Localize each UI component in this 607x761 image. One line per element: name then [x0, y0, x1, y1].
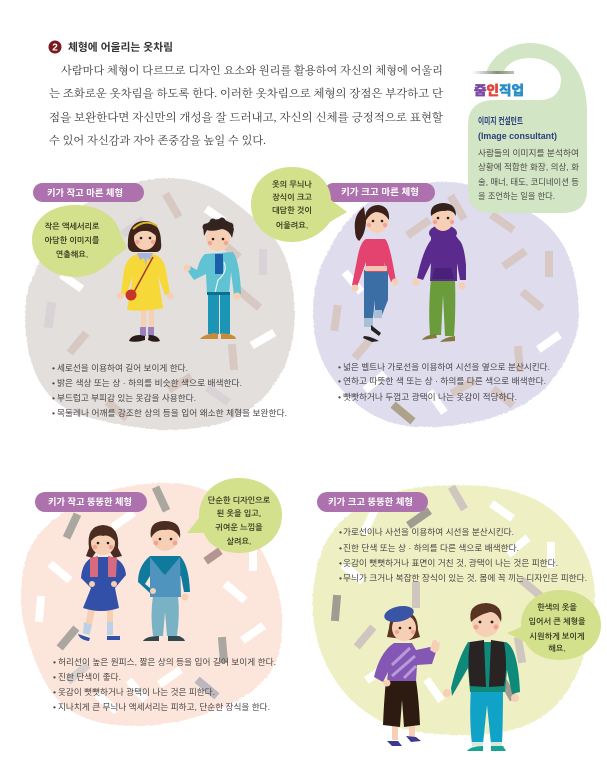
speech bubble: single colour: 입어서 큰 체형을 — [528, 617, 586, 626]
intro paragraph: 수 있어 자신감과 자아 존중감을 높일 수 있다. — [49, 133, 266, 147]
confetti strips — [330, 194, 562, 424]
bullet list: 진한 단색이 좋다. — [58, 672, 121, 682]
speech bubble: small accessories — [32, 205, 127, 277]
bullet list: • — [339, 527, 342, 537]
blob background — [21, 483, 282, 726]
bullet list: • — [339, 573, 342, 583]
character: boy in purple hoodie — [412, 203, 466, 342]
label: short and stout: 키가 작고 뚱뚱한 체형 — [48, 496, 132, 507]
bullet list: 빳빳하거나 두껍고 광택이 나는 옷감이 적당하다. — [343, 392, 517, 402]
bullet list: 옷감이 뻣뻣하거나 광택이 나는 것은 피한다. — [58, 687, 215, 697]
speech bubble: single colour: 한색의 옷을 — [537, 603, 577, 612]
character: girl in pink top — [352, 205, 398, 342]
bullet list: • — [52, 378, 55, 388]
bullet list: • — [338, 376, 341, 386]
number badge: 2 — [52, 42, 58, 54]
speech bubble: single colour: 시원하게 보이게 — [530, 632, 584, 641]
bullet list — [53, 657, 276, 712]
bullet list: 진한 단색 또는 상 · 하의를 다른 색으로 배색한다. — [343, 543, 519, 553]
speech bubble: single colour: 해요. — [548, 644, 566, 653]
panel: tall and thin — [313, 182, 579, 427]
bullet list: 넓은 벨트나 가로선을 이용하여 시선을 옆으로 분산시킨다. — [343, 362, 550, 372]
label: tall and thin — [324, 183, 435, 202]
intro paragraph: 는 조화로운 옷차림을 하도록 한다. 이러한 옷차림으로 체형의 장점은 부각하고 단 — [49, 86, 443, 100]
blob background — [313, 485, 595, 735]
bullet list — [339, 527, 587, 583]
speech bubble: small accessories: 연출해요. — [56, 250, 88, 259]
hanger shadow — [472, 71, 514, 74]
label: short and stout — [35, 492, 147, 512]
bullet list: • — [338, 362, 341, 372]
speech bubble: simple design: 귀여운 느낌을 — [214, 523, 263, 532]
bullet list: • — [339, 543, 342, 553]
bullet list: • — [339, 558, 342, 568]
bullet list: 세로선을 이용하여 길어 보이게 한다. — [57, 363, 188, 373]
bullet list: • — [52, 408, 55, 418]
door hanger: job info card — [468, 43, 587, 213]
bullet list: 연하고 따뜻한 색 또는 상 · 하의를 다른 색으로 배색한다. — [343, 376, 546, 386]
card body: 술, 매너, 태도, 코디네이션 등 — [478, 177, 579, 187]
bullet list: 목둘레나 어깨를 강조한 상의 등을 입어 왜소한 체형을 보완한다. — [57, 408, 287, 418]
label: tall and stout: 키가 크고 뚱뚱한 체형 — [328, 496, 413, 507]
bullet list: 지나치게 큰 무늬나 액세서리는 피하고, 단순한 장식을 한다. — [58, 702, 270, 712]
card heading — [478, 115, 557, 141]
panel: short and thin — [25, 178, 295, 430]
character: man in black vest — [443, 603, 520, 751]
label: short and thin — [33, 183, 144, 202]
speech bubble: bold patterns: 어울려요. — [276, 221, 308, 230]
label: short and thin: 키가 작고 마른 체형 — [47, 187, 123, 198]
hanger shape — [468, 43, 587, 213]
card body — [478, 148, 579, 201]
heading text: 체형에 어울리는 옷차림 — [68, 40, 173, 54]
speech bubble: single colour — [507, 590, 601, 660]
speech bubble: simple design: 단순한 디자인으로 — [208, 496, 271, 505]
character: boy in blue jacket — [184, 218, 241, 339]
card body: 상황에 적합한 화장, 의상, 화 — [478, 162, 579, 172]
intro paragraph: 점을 보완한다면 자신만의 개성을 잘 드러내고, 자신의 신체를 긍정적으로 표현할 — [49, 110, 443, 124]
panel: short and stout — [21, 478, 282, 726]
bullet list — [52, 363, 287, 418]
speech bubble: bold patterns — [251, 167, 347, 242]
blob background — [25, 178, 295, 430]
bullet list: • — [52, 363, 55, 373]
bullet list: • — [53, 672, 56, 682]
character: girl in yellow dress — [116, 221, 174, 342]
card body: 사람들의 이미지를 분석하여 — [478, 148, 579, 158]
section heading — [48, 40, 173, 54]
bullet list: • — [53, 657, 56, 667]
bullet list: 무늬가 크거나 복잡한 장식이 있는 것, 몸에 꼭 끼는 디자인은 피한다. — [343, 573, 587, 583]
card heading: (Image consultant) — [478, 131, 557, 141]
confetti strips — [44, 192, 276, 421]
intro paragraph: 사람마다 체형이 다르므로 디자인 요소와 원리를 활용하여 자신의 체형에 어울리 — [61, 63, 443, 77]
bullet list: 허리선이 높은 원피스, 짧은 상의 등을 입어 길어 보이게 한다. — [58, 657, 276, 667]
bullet list: • — [53, 687, 56, 697]
character: boy in blue vest — [138, 521, 190, 641]
bullet list: 밝은 색상 또는 상 · 하의를 비슷한 색으로 배색한다. — [57, 378, 242, 388]
bullet list: • — [338, 392, 341, 402]
confetti strips — [35, 486, 266, 714]
speech bubble: small accessories: 작은 액세서리로 — [45, 222, 100, 231]
speech bubble: small accessories: 아담한 이미지를 — [45, 236, 100, 245]
card body: 을 조언하는 일을 한다. — [478, 191, 555, 201]
panel: tall and stout — [313, 485, 601, 751]
speech bubble: simple design — [187, 478, 282, 553]
bullet list: 가로선이나 사선을 이용하여 시선을 분산시킨다. — [343, 527, 514, 537]
confetti strips — [331, 485, 555, 703]
bullet list — [338, 362, 550, 402]
label: tall and stout — [317, 492, 428, 512]
bullet list: 부드럽고 부피감 있는 옷감을 사용한다. — [57, 393, 196, 403]
bullet list: 옷감이 뻣뻣하거나 표면이 거친 것, 광택이 나는 것은 피한다. — [343, 558, 558, 568]
speech bubble: bold patterns: 장식이 크고 — [272, 193, 312, 202]
speech bubble: simple design: 된 옷을 입고, — [217, 509, 261, 518]
bullet list: • — [52, 393, 55, 403]
title: zoom-in job: 줌인직업 — [474, 83, 524, 98]
speech bubble: simple design: 살려요. — [227, 537, 251, 546]
speech bubble: bold patterns: 옷의 무늬나 — [272, 180, 312, 189]
blob background — [313, 182, 579, 427]
character: girl in blue dress — [78, 525, 126, 641]
bullet list: • — [53, 702, 56, 712]
speech bubble: bold patterns: 대담한 것이 — [272, 206, 312, 215]
card heading: 이미지 컨설턴트 — [478, 115, 523, 126]
character: woman in purple sweater — [374, 604, 440, 746]
label: tall and thin: 키가 크고 마른 체형 — [341, 186, 419, 197]
intro paragraph — [49, 63, 443, 147]
